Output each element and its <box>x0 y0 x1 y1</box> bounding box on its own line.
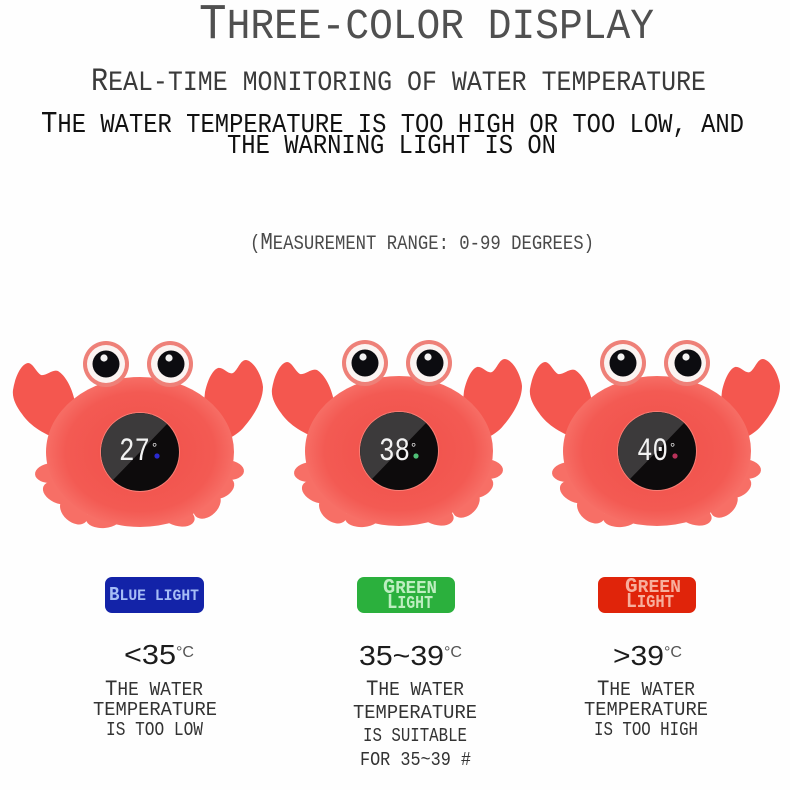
badge: red with green light label <box>598 576 696 614</box>
temperature: above 39: °C <box>664 644 682 661</box>
description: too low: THE WATER <box>105 677 203 702</box>
crab thermometer: green 38 <box>272 340 522 529</box>
crab thermometer: red 40: ° <box>670 440 675 455</box>
description: suitable <box>353 677 477 771</box>
crab thermometer: green 38: 38 <box>379 433 410 470</box>
temperature: below 35: °C <box>176 644 194 661</box>
temperature: below 35: <35 <box>124 639 176 670</box>
warning statement: THE WARNING LIGHT IS ON <box>227 132 556 162</box>
temperature: above 39 <box>613 640 682 671</box>
crab thermometer: red 40 <box>530 340 780 529</box>
warning statement <box>41 107 744 162</box>
badge: red with green light label: GREEN <box>625 576 681 599</box>
badge: green light: LIGHT <box>387 592 433 615</box>
crab thermometer: blue 27: ° <box>152 440 157 455</box>
crab thermometer: red 40: 40 <box>637 433 668 470</box>
description: too high: IS TOO HIGH <box>594 719 698 741</box>
crab thermometer: blue 27: 27 <box>119 433 150 470</box>
temperature: 35 to 39: 35~39 <box>359 640 444 671</box>
crab thermometer: blue 27 <box>13 341 263 530</box>
badge: red with green light label: LIGHT <box>626 591 674 614</box>
crab thermometer: green 38: ° <box>411 440 416 455</box>
description: suitable: THE WATER <box>366 677 464 702</box>
measurement range note: (MEASUREMENT RANGE: 0-99 DEGREES) <box>250 230 594 257</box>
temperature: above 39: >39 <box>613 640 664 671</box>
badge: green light: GREEN <box>383 577 437 600</box>
badge: blue light: BLUE LIGHT <box>109 584 199 606</box>
description: too high: THE WATER <box>597 677 695 702</box>
temperature: 35 to 39: °C <box>444 644 462 661</box>
description: suitable: TEMPERATURE <box>353 702 477 724</box>
description: too high: TEMPERATURE <box>584 699 708 721</box>
description: suitable: FOR 35~39 # <box>360 749 471 771</box>
description: suitable: IS SUITABLE <box>363 725 467 747</box>
description: too low: TEMPERATURE <box>93 699 217 721</box>
badge: blue light <box>105 577 204 613</box>
description: too low: IS TOO LOW <box>106 719 203 741</box>
temperature: below 35 <box>124 639 194 670</box>
subtitle: REAL-TIME MONITORING OF WATER TEMPERATURE <box>91 63 706 100</box>
description: too low <box>93 677 217 741</box>
description: too high <box>584 677 708 741</box>
badge: green light <box>357 577 455 615</box>
